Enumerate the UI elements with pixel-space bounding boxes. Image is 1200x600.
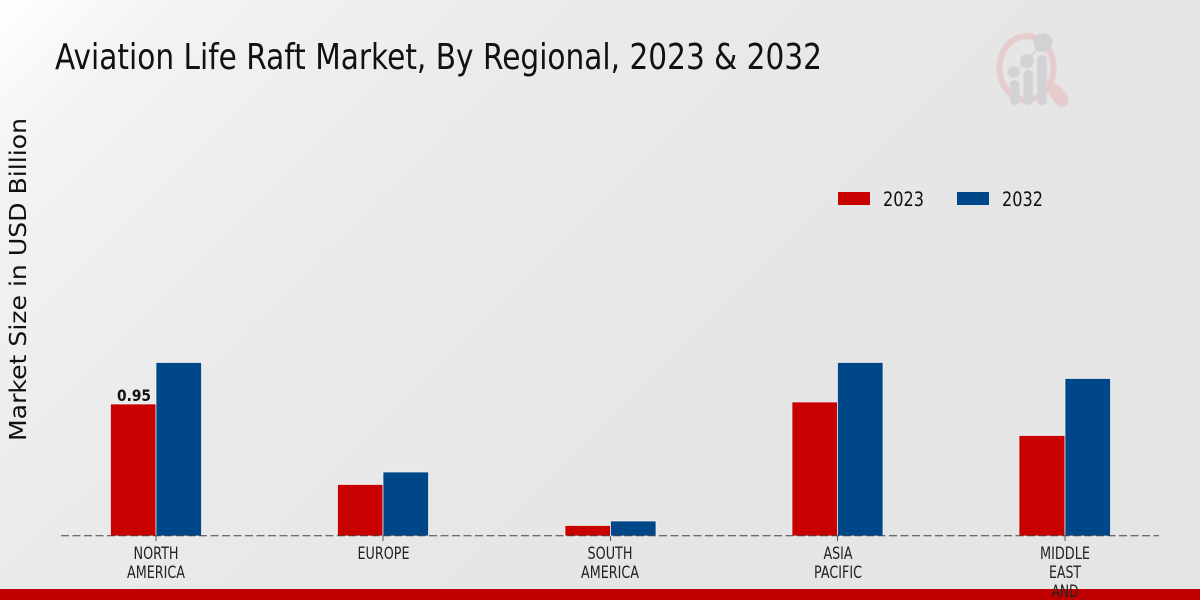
category: Middle East and Africa: EAST	[1049, 563, 1081, 583]
title: Aviation Life Raft Market, By Regional, 2023 & 2032	[55, 37, 822, 78]
category: Asia Pacific: PACIFIC	[814, 563, 862, 583]
category: Asia Pacific: ASIA	[824, 544, 853, 564]
bars: Europe	[338, 472, 428, 536]
footer bar	[0, 589, 1200, 600]
category: North America: NORTH	[134, 544, 178, 564]
category: South America: AMERICA	[581, 563, 639, 583]
category: South America: SOUTH	[588, 544, 632, 564]
legend	[838, 188, 1043, 211]
legend: 2023: 2023	[883, 188, 924, 211]
category: North America	[127, 544, 185, 583]
icon: watermark logo	[1000, 33, 1062, 105]
legend: 2032: 2032	[1002, 188, 1043, 211]
category: Middle East and Africa: MIDDLE	[1040, 544, 1090, 564]
bars: North America	[110, 362, 202, 536]
value label: 0.95	[117, 386, 151, 405]
legend: 2023	[838, 188, 924, 211]
category: Europe: EUROPE	[358, 544, 410, 564]
bar chart	[61, 362, 1159, 541]
bars: South America	[565, 521, 656, 536]
category: South America	[581, 544, 639, 583]
legend: 2032	[957, 188, 1043, 211]
bars: Middle East and Africa	[1019, 378, 1110, 536]
category: North America: AMERICA	[127, 563, 185, 583]
category: Asia Pacific	[814, 544, 862, 583]
category: Middle East and Africa	[1040, 544, 1090, 600]
y axis label: Market Size in USD Billion	[6, 118, 32, 441]
category labels	[127, 544, 1090, 600]
bars: Asia Pacific	[792, 362, 883, 536]
